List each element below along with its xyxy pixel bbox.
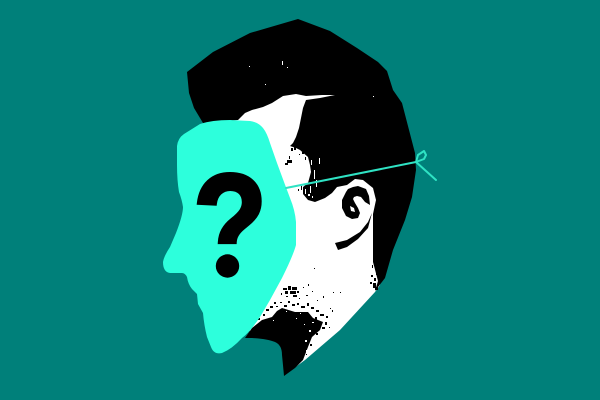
question mark dot (216, 254, 239, 278)
stubble speckles (258, 268, 341, 355)
ear inner shadow (342, 186, 370, 219)
question mark (196, 172, 262, 278)
question mark hook: ? (193, 145, 267, 301)
hair and sideburn (187, 19, 416, 291)
temple hair flecks (285, 135, 306, 191)
neck hairline speckles (370, 265, 379, 290)
head portrait (187, 19, 416, 376)
ear lobe detail (350, 206, 355, 212)
jaw shadow (335, 213, 372, 250)
beard (245, 308, 323, 376)
white flecks in sideburn (305, 158, 320, 198)
thread with loop (286, 151, 436, 188)
ear (342, 186, 370, 219)
hair highlights (249, 61, 374, 97)
illustration: head with question mark mask (163, 19, 437, 376)
face mask (163, 120, 296, 353)
white flecks in beard (273, 311, 314, 352)
head base: white skin (225, 90, 380, 374)
